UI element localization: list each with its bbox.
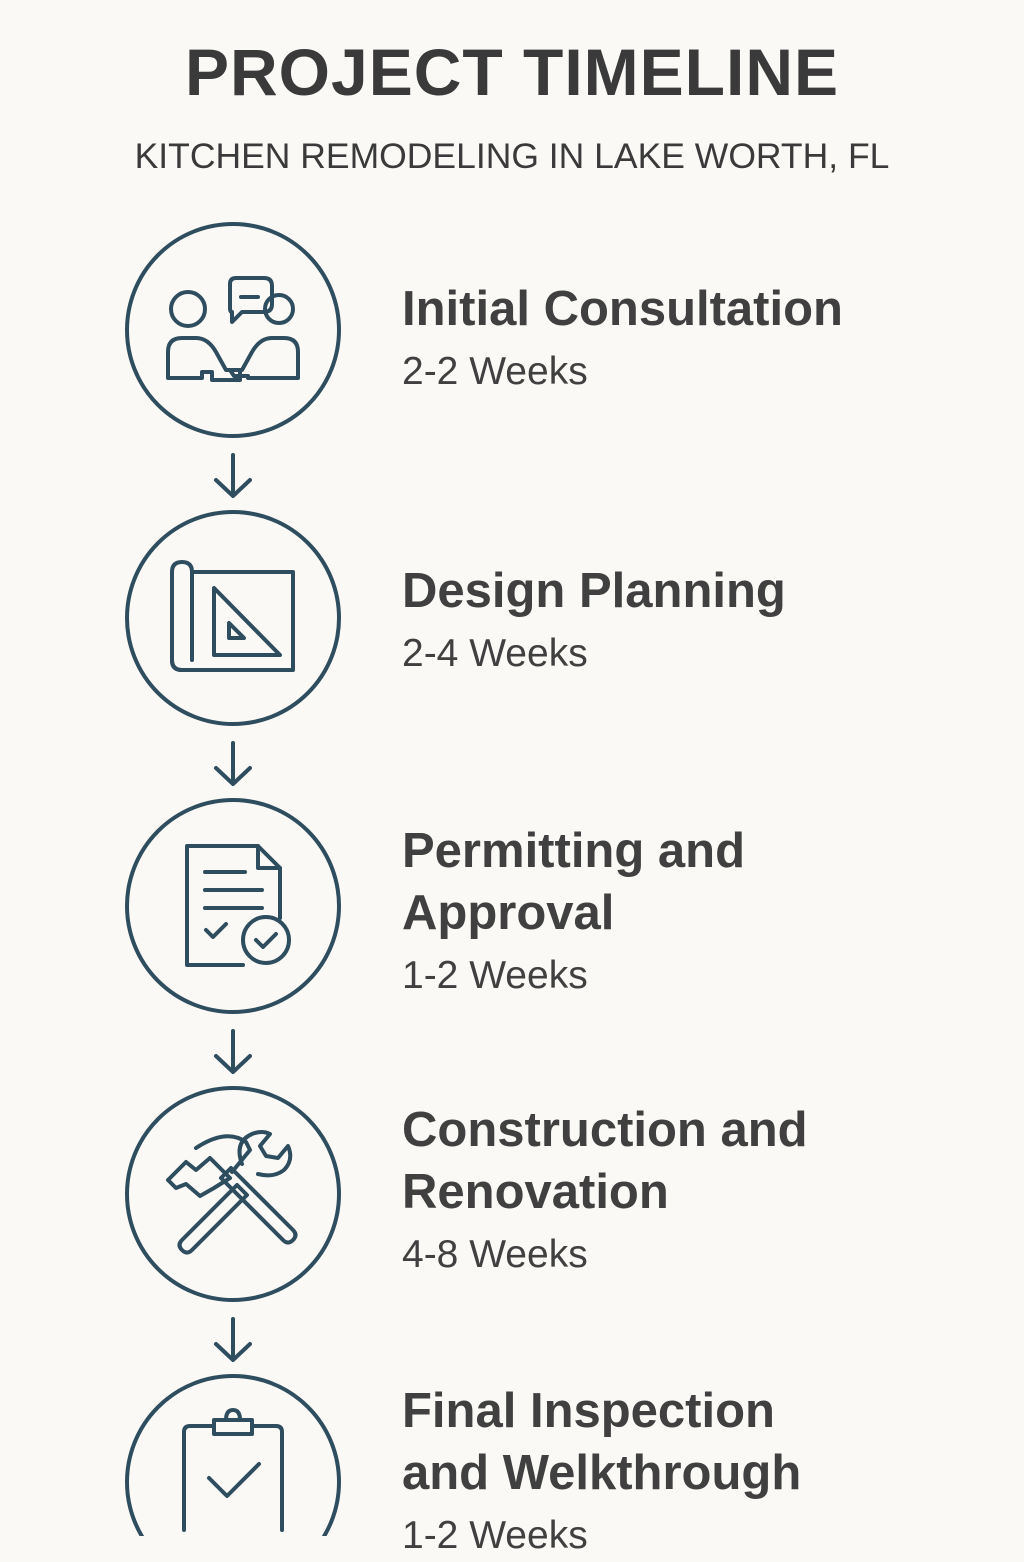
step 3 text: Permitting and xyxy=(402,824,745,878)
icon: permit xyxy=(127,800,339,1012)
step 2 text: Design Planning xyxy=(402,564,786,618)
step 2 text: 2-4 Weeks xyxy=(402,632,588,675)
icon: inspection xyxy=(127,1376,339,1562)
arrow xyxy=(216,1319,250,1360)
step 3 text: 1-2 Weeks xyxy=(402,954,588,997)
step 1 text xyxy=(402,282,843,393)
subtitle: KITCHEN REMODELING IN LAKE WORTH, FL xyxy=(135,136,889,176)
arrow xyxy=(216,743,250,784)
step 5 text: Final Inspection xyxy=(402,1384,775,1438)
step 1 text: 2-2 Weeks xyxy=(402,350,588,393)
step 3 text xyxy=(402,824,745,997)
arrow xyxy=(216,455,250,496)
step 5 text: and Welkthrough xyxy=(402,1446,801,1500)
step 5 text: 1-2 Weeks xyxy=(402,1514,588,1557)
step 1 text: Initial Consultation xyxy=(402,282,843,336)
step 4 text: Renovation xyxy=(402,1165,669,1219)
step 3 text: Approval xyxy=(402,886,614,940)
step 4 text: Construction and xyxy=(402,1103,808,1157)
icon: consultation xyxy=(127,224,339,436)
step 2 text xyxy=(402,564,786,675)
step 5 text xyxy=(402,1384,801,1557)
icon: tools xyxy=(127,1088,339,1300)
icon: design planning xyxy=(127,512,339,724)
title: PROJECT TIMELINE xyxy=(185,35,839,109)
step 4 text: 4-8 Weeks xyxy=(402,1233,588,1276)
arrow xyxy=(216,1031,250,1072)
step 4 text xyxy=(402,1103,808,1276)
